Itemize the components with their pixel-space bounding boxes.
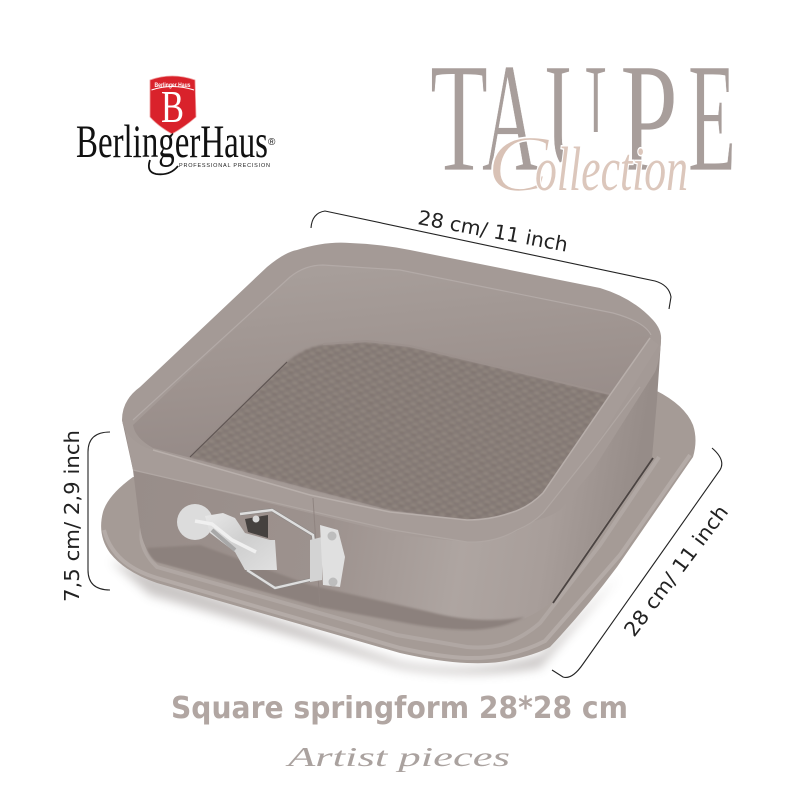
script: Collection letters: ollection: [535, 136, 688, 204]
tagline: Artist pieces: Artist pieces: [285, 742, 510, 772]
bracket line: [552, 448, 722, 677]
heading: TAUPE: U: [545, 31, 607, 204]
body seam: [313, 498, 320, 607]
lever arm shadow: [212, 530, 235, 550]
dimension: side depth: [552, 448, 733, 677]
latch plate: [205, 513, 277, 570]
brand logo: Berlinger Haus: [76, 76, 276, 174]
icon: red shield: Berlinger Haus: [154, 83, 191, 89]
bottom band shadow: [147, 545, 525, 630]
wordmark g swash: [149, 160, 178, 174]
wire loop shadow: [240, 510, 318, 588]
wire loop: [240, 510, 318, 588]
upper rivet: [252, 516, 260, 522]
bracket line: [311, 211, 671, 309]
mask over U bowl: [480, 132, 612, 200]
heading: TAUPE: P: [620, 31, 678, 204]
latch disc: [177, 504, 213, 540]
heading: TAUPE: A: [482, 31, 538, 204]
dark gap on right side: [553, 458, 653, 603]
front rim highlight: [153, 338, 650, 520]
product: square springform pan: [101, 243, 695, 674]
icon: red shield: B: [161, 81, 184, 132]
tagline: PROFESSIONAL PRECISION: [179, 163, 270, 169]
height label: 7,5 cm/ 2,9 inch: [60, 430, 84, 602]
script: Collection capital: C: [487, 121, 551, 209]
dimension: height: [60, 430, 110, 602]
depth label: 28 cm/ 11 inch: [619, 500, 733, 641]
tray base: [101, 390, 695, 663]
registered mark: ®: [268, 137, 276, 148]
floor back edge: [323, 341, 610, 394]
heading: TAUPE: [430, 31, 736, 204]
floor left seam: [190, 362, 287, 457]
lever arm: [195, 521, 256, 552]
tray lower edge highlight: [104, 455, 690, 658]
collection title: Taupe Collection: [430, 31, 736, 209]
spring ring band: [141, 457, 659, 648]
inner wall top highlight: [133, 265, 651, 420]
pan outer body: [122, 300, 661, 630]
embossed floor: [190, 342, 610, 520]
front rim strip: [125, 338, 659, 542]
pan rim outer: [122, 243, 661, 526]
front rim crease: [133, 387, 640, 542]
latch window: [245, 515, 268, 538]
inner wall: [133, 265, 651, 520]
bracket line: [88, 432, 110, 590]
hinge strip: [310, 537, 322, 582]
heading: TAUPE: T: [430, 31, 488, 204]
hinge rivet bottom: [328, 578, 338, 586]
wordmark: BerlingerHaus: [76, 116, 268, 168]
hinge rivet top: [328, 532, 336, 540]
right hinge plate: [320, 525, 345, 587]
dimension: top width: [311, 205, 671, 309]
tray shadow: [110, 560, 620, 674]
latch: [177, 504, 345, 588]
heading: TAUPE: E: [688, 31, 736, 204]
icon: red shield: [150, 76, 196, 134]
width label: 28 cm/ 11 inch: [416, 205, 570, 257]
product name: Square springform 28*28 cm: [171, 691, 628, 726]
